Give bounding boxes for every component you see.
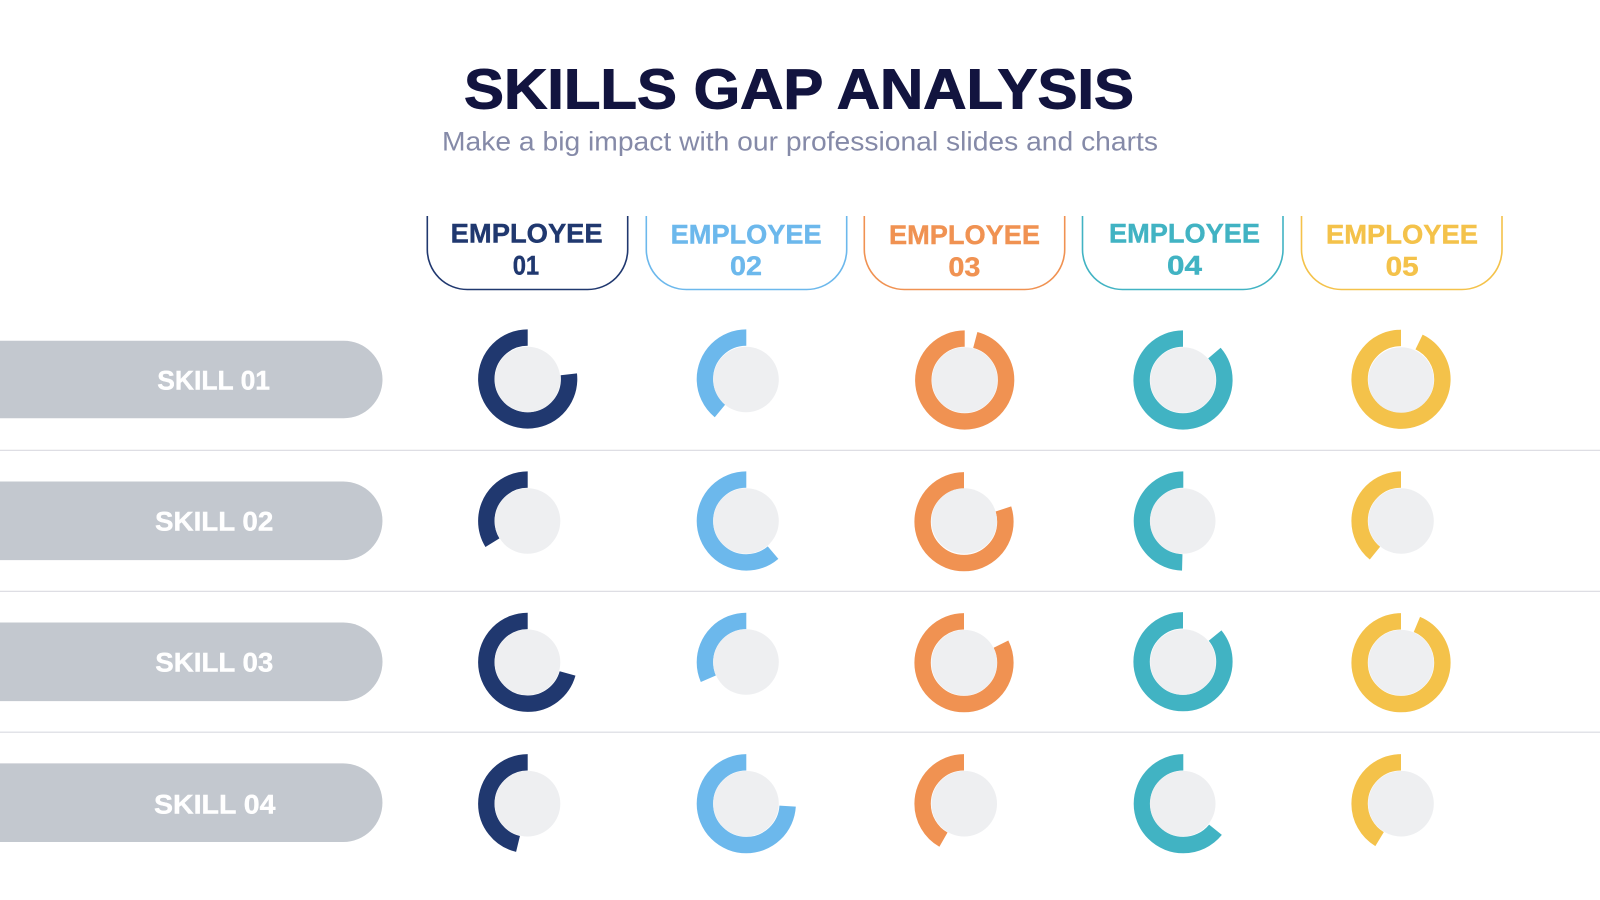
title: SKILLS GAP ANALYSIS xyxy=(464,58,1134,121)
column header: employee 05 xyxy=(1302,216,1502,290)
subtitle: Make a big impact with our professional slides and charts xyxy=(442,126,1158,156)
column header: employee 03: 03 xyxy=(948,252,980,282)
column header: employee 01 xyxy=(427,216,628,290)
donut: skill 02 employee 05 xyxy=(1360,480,1442,562)
column header: employee 02 xyxy=(646,216,847,290)
donut: skill 01 employee 02 xyxy=(705,338,788,420)
donut: skill 04 employee 02 xyxy=(705,762,788,845)
donut: skill 04 employee 01 xyxy=(486,762,569,845)
row label: skill 03 xyxy=(0,622,383,701)
donut: skill 03 employee 04 xyxy=(1142,620,1224,703)
column header: employee 03 xyxy=(864,216,1065,290)
donut: skill 04 employee 03 xyxy=(923,762,1005,845)
column header: employee 01: EMPLOYEE xyxy=(451,219,603,249)
donut: skill 02 employee 02 xyxy=(705,480,788,562)
donut: skill 01 employee 04 xyxy=(1142,339,1224,421)
column header: employee 02: EMPLOYEE xyxy=(671,219,822,249)
row label: skill 04: SKILL 04 xyxy=(154,789,276,819)
column header: employee 02: 02 xyxy=(730,251,762,281)
donut: skill 02 employee 01 xyxy=(486,480,569,562)
donut: skill 04 employee 04 xyxy=(1142,762,1225,845)
donut: skill 01 employee 03 xyxy=(923,339,1006,421)
donut: skill 03 employee 03 xyxy=(923,621,1005,704)
donut: skill 02 employee 03 xyxy=(923,480,1005,563)
column header: employee 03: EMPLOYEE xyxy=(889,220,1040,250)
donut: skill 03 employee 01 xyxy=(486,621,569,704)
donut: skill 01 employee 05 xyxy=(1360,338,1442,421)
column header: employee 01: 01 xyxy=(513,251,539,281)
column header: employee 04: 04 xyxy=(1167,250,1202,280)
row label: skill 02 xyxy=(0,482,382,560)
column header: employee 05: EMPLOYEE xyxy=(1326,219,1478,249)
row label: skill 01 xyxy=(0,341,382,418)
row label: skill 02: SKILL 02 xyxy=(155,507,273,537)
column header: employee 04 xyxy=(1082,216,1283,290)
row label: skill 01: SKILL 01 xyxy=(157,366,270,396)
donut: skill 03 employee 05 xyxy=(1360,621,1442,704)
donut: skill 03 employee 02 xyxy=(705,621,788,704)
column header: employee 05: 05 xyxy=(1386,251,1419,281)
donut: skill 04 employee 05 xyxy=(1360,762,1442,845)
donut: skill 02 employee 04 xyxy=(1142,480,1225,562)
column header: employee 04: EMPLOYEE xyxy=(1109,218,1260,248)
row label: skill 03: SKILL 03 xyxy=(155,648,273,678)
row label: skill 04 xyxy=(0,763,382,842)
donut: skill 01 employee 01 xyxy=(486,338,569,420)
